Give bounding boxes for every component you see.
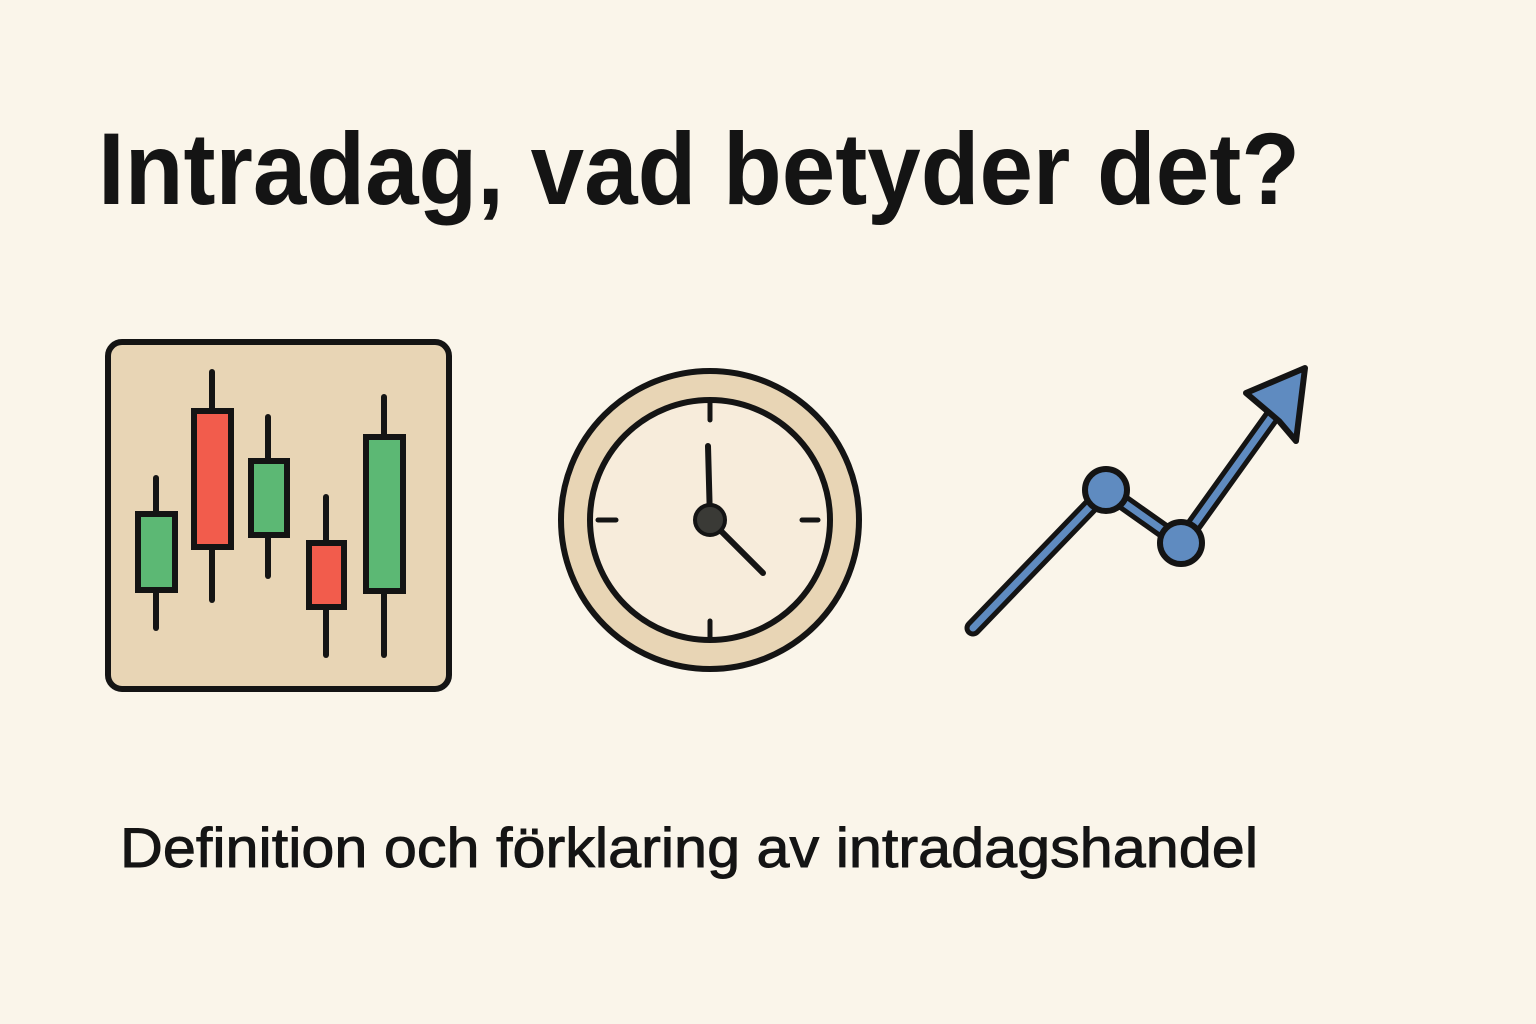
subtitle: Definition och förklaring av intradagshandel — [120, 816, 1258, 879]
icon: trend arrow — [973, 368, 1305, 628]
panel: candlestick chart — [108, 342, 449, 689]
icon: clock — [561, 371, 859, 669]
title: Intradag, vad betyder det? — [98, 112, 1300, 226]
